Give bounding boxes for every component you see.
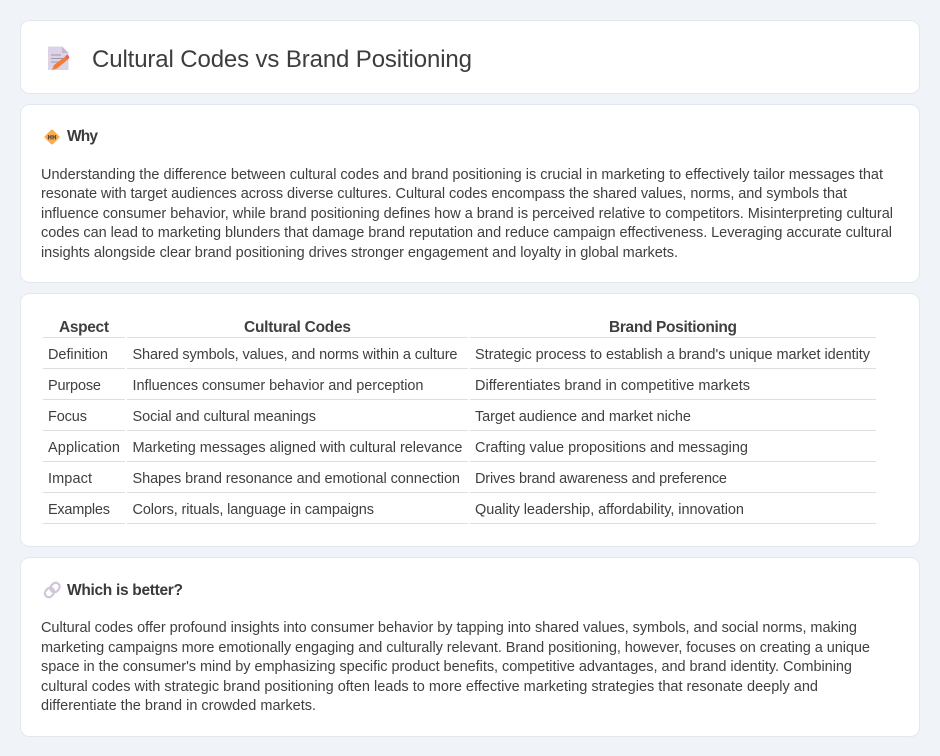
icon: document with pencil: [48, 46, 70, 70]
title: Cultural Codes vs Brand Positioning: [92, 46, 472, 73]
table row: impact: Impact: [48, 471, 92, 487]
panel: why: [20, 104, 920, 282]
table row: focus: [48, 409, 691, 425]
text block: why paragraph: resonate with target audiences across diverse cultures. Cultural codes encompass the shared values, norms, and symbols that: [41, 186, 847, 202]
text block: which is better paragraph: cultural codes with strategic brand positioning often leads to more effective marketing strategies that resonate deeply and: [41, 679, 818, 695]
table row: application: Marketing messages aligned with cultural relevance: [132, 440, 462, 456]
table row: examples: Quality leadership, affordability, innovation: [475, 502, 744, 518]
panel: which is better: [20, 558, 920, 736]
table row: examples: Examples: [48, 502, 110, 518]
table row: impact: [48, 471, 727, 487]
table row: purpose: Purpose: [48, 378, 101, 394]
panel: title header: [20, 20, 920, 94]
text block: why paragraph: influence consumer behavior, while brand positioning defines how a brand is perceived relative to competitors. Misinterpreting cultural: [41, 206, 893, 222]
table row: impact: Drives brand awareness and preference: [475, 471, 727, 487]
table row: impact: Shapes brand resonance and emotional connection: [132, 471, 460, 487]
text block: which is better paragraph: space in the consumer's mind by emphasizing specific product benefits, competitive advantages, and brand identity. Combining: [41, 659, 852, 675]
table row: focus: Focus: [48, 409, 87, 425]
icon: chain link: [43, 581, 61, 599]
table row: purpose: Differentiates brand in competitive markets: [475, 378, 750, 394]
text block: which is better paragraph: differentiate the brand in crowded markets.: [41, 698, 316, 714]
text block: why paragraph: codes can lead to marketing blunders that damage brand reputation and reduce campaign effectiveness. Leveraging accurate cultural: [41, 225, 892, 241]
table row: examples: [48, 502, 744, 518]
table row: definition: Strategic process to establish a brand's unique market identity: [475, 347, 871, 363]
table row: purpose: [48, 378, 750, 394]
table row: application: [48, 440, 748, 456]
table header row: Aspect: [59, 319, 109, 336]
table header row: Cultural Codes: [244, 319, 351, 336]
text block: why paragraph: insights alongside clear brand positioning drives stronger engagement and loyalty in global markets.: [41, 245, 678, 261]
table header row: Brand Positioning: [609, 319, 737, 336]
table row: definition: Shared symbols, values, and norms within a culture: [132, 347, 458, 363]
heading: why: Why: [67, 128, 98, 145]
table row: application: Application: [48, 440, 120, 456]
table row: purpose: Influences consumer behavior and perception: [132, 378, 424, 394]
heading: which is better: Which is better?: [67, 582, 183, 599]
text block: which is better paragraph: [41, 620, 870, 714]
table row: definition: [48, 347, 871, 363]
table row: application: Crafting value propositions and messaging: [475, 440, 748, 456]
icon: orange diamond sign: [44, 129, 60, 145]
table row: focus: Target audience and market niche: [475, 409, 691, 425]
text block: which is better paragraph: marketing campaigns more emotionally engaging and culturally relevant. Brand positioning, however, focuses on creating a unique: [41, 640, 870, 656]
text block: which is better paragraph: Cultural codes offer profound insights into consumer behavior by tapping into shared values, symbols, and social norms, making: [41, 620, 857, 636]
table row: focus: Social and cultural meanings: [132, 409, 316, 425]
table row: definition: Definition: [48, 347, 108, 363]
text block: why paragraph: [41, 167, 893, 261]
text block: why paragraph: Understanding the difference between cultural codes and brand positioning is crucial in marketing to effectively tailor messages that: [41, 167, 883, 183]
table row: examples: Colors, rituals, language in campaigns: [132, 502, 374, 518]
table header row: [59, 319, 737, 336]
panel: comparison table: [20, 294, 920, 546]
